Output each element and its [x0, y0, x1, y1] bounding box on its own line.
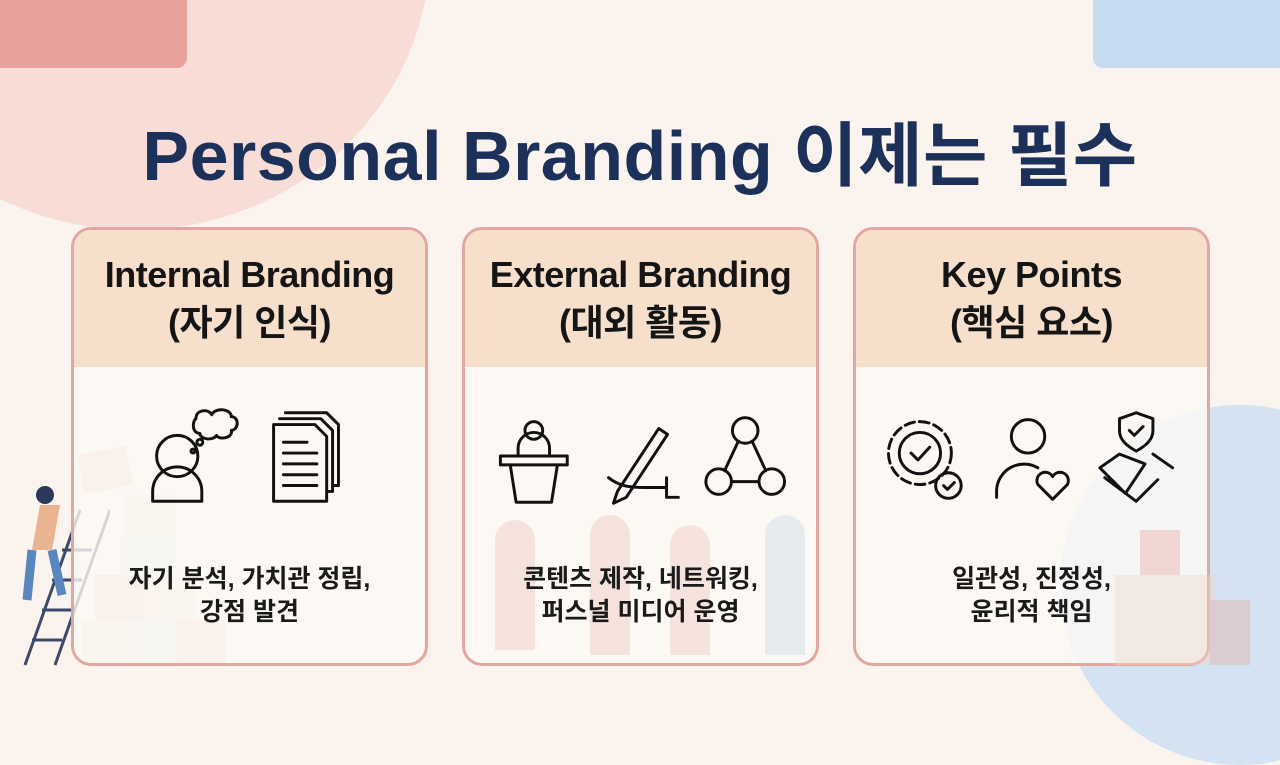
header: External Branding — [490, 254, 791, 294]
text: 일관성, 진정성, — [952, 565, 1111, 593]
text: 콘텐츠 제작, 네트워킹, — [523, 565, 758, 593]
text: 퍼스널 미디어 운영 — [542, 598, 739, 626]
text: 강점 발견 — [200, 598, 299, 626]
text — [129, 565, 370, 626]
header — [74, 230, 425, 367]
title: Personal Branding 이제는 필수 — [142, 117, 1138, 195]
header: Internal Branding — [105, 254, 394, 294]
text: 자기 분석, 가치관 정립, — [129, 565, 370, 593]
card: key points — [853, 227, 1210, 666]
header — [465, 230, 816, 367]
decoration: castle blocks right — [1115, 530, 1250, 665]
header: (자기 인식) — [168, 302, 331, 342]
header: (대외 활동) — [559, 302, 722, 342]
card: internal branding — [71, 227, 428, 666]
header: Key Points — [941, 254, 1122, 294]
icons: gear check, person heart, handshake shield — [887, 411, 1174, 503]
text — [523, 565, 758, 626]
background blue block — [1093, 0, 1280, 68]
background pink circle — [0, 0, 430, 230]
background people decoration — [495, 515, 805, 655]
icon: climber on ladder — [22, 486, 110, 666]
text: 윤리적 책임 — [971, 598, 1092, 626]
text — [952, 565, 1111, 626]
icons: podium, pen hand, network — [498, 416, 786, 505]
card: external branding — [462, 227, 819, 666]
header: (핵심 요소) — [950, 302, 1113, 342]
header — [856, 230, 1207, 367]
background blue circle — [1060, 405, 1280, 765]
background pink block — [0, 0, 187, 68]
decoration: blocks left — [82, 664, 84, 665]
icons: thinking person, documents — [151, 408, 340, 503]
